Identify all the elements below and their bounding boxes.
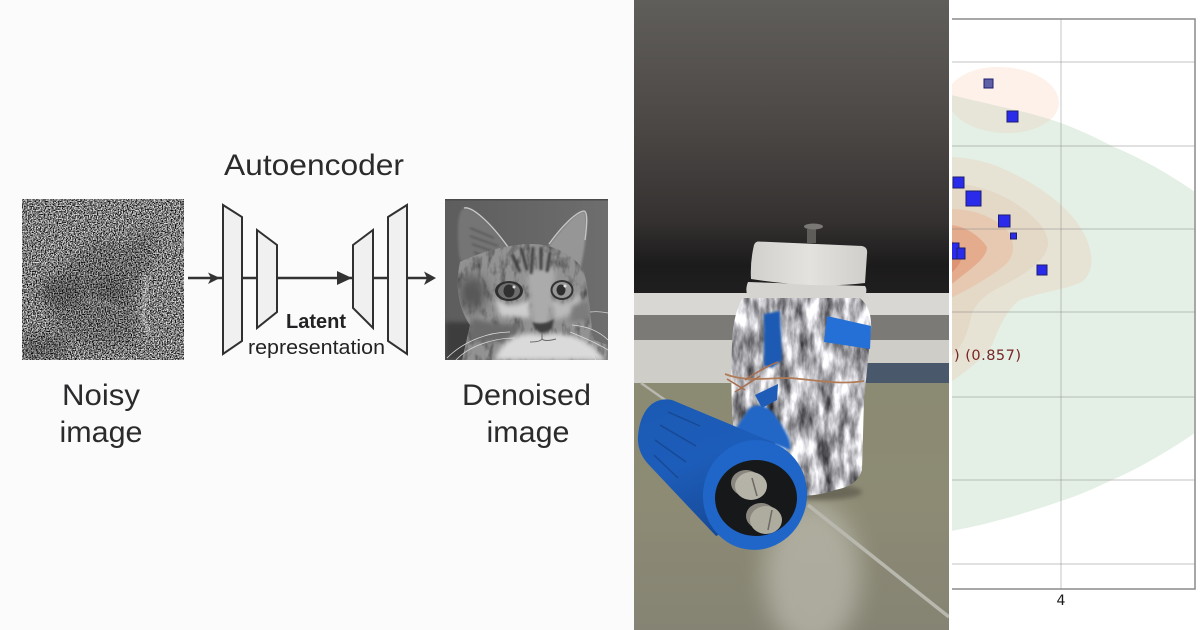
data points bbox=[951, 79, 1047, 275]
blue capacitor bbox=[638, 399, 816, 558]
label: denoised image: Denoised bbox=[462, 379, 591, 412]
panel: capacitor photo bbox=[634, 0, 949, 630]
axis frame bbox=[952, 19, 1195, 589]
label: denoised image bbox=[462, 379, 591, 449]
contour regions bbox=[945, 63, 1195, 531]
label: noisy image: image bbox=[60, 416, 142, 449]
label: latent representation bbox=[248, 311, 385, 359]
grid lines bbox=[952, 19, 1195, 589]
panel: contour plot crop bbox=[952, 18, 1196, 605]
panel: autoencoder diagram bbox=[22, 154, 608, 448]
label: latent representation: Latent bbox=[286, 311, 346, 333]
icon: decoder layers bbox=[353, 205, 407, 354]
annotation value: ) (0.857) bbox=[954, 348, 1021, 364]
x axis tick label: 4 bbox=[1057, 593, 1066, 609]
jar wrapped in foil bbox=[725, 224, 875, 500]
arrow: main data flow line bbox=[188, 271, 436, 285]
label: noisy image: Noisy bbox=[62, 379, 140, 412]
icon: encoder layers bbox=[223, 205, 277, 354]
label: latent representation: representation bbox=[248, 337, 385, 359]
label: noisy image bbox=[60, 379, 142, 449]
image: denoised cat bbox=[445, 199, 608, 360]
tile grout lines bbox=[641, 383, 949, 617]
image: noisy cat bbox=[22, 199, 184, 360]
title: Autoencoder: Autoencoder bbox=[224, 149, 404, 182]
label: denoised image: image bbox=[486, 416, 570, 449]
